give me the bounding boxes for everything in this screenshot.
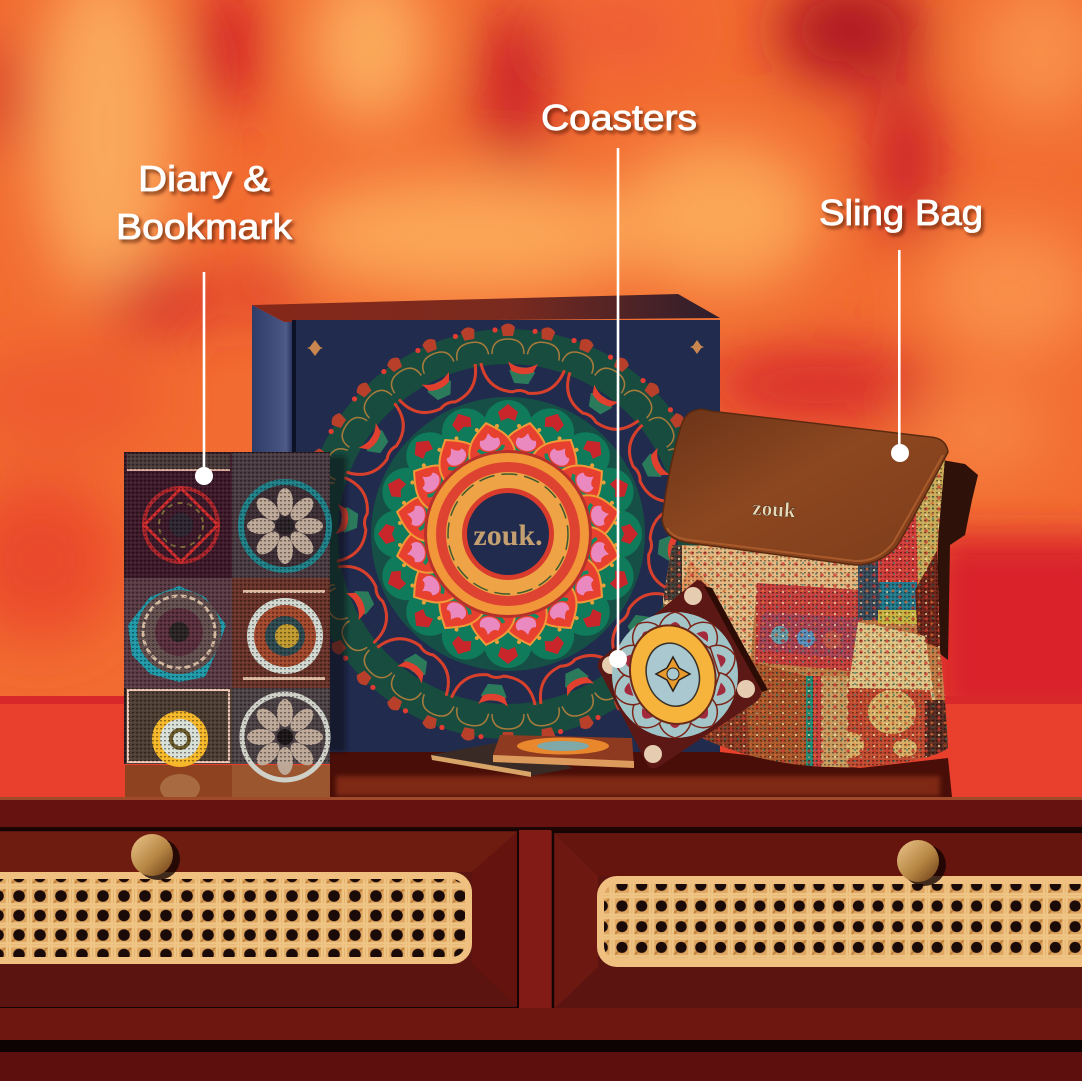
- scalloped rim: [298, 324, 719, 744]
- label: Diary & Bookmark: [116, 158, 293, 247]
- tile top-left maroon: [125, 453, 232, 578]
- coaster corner petals: [602, 587, 755, 763]
- sling bag: [655, 409, 978, 780]
- tile bottom-left yellow ring: [126, 688, 232, 767]
- pink lotus petals: [393, 419, 623, 649]
- left knob: [131, 834, 180, 880]
- left drawer: [0, 830, 518, 1008]
- bag logo: zouk: [752, 496, 797, 523]
- pointer: coasters: [609, 148, 627, 668]
- background: blurred orange and red wall: [0, 0, 1082, 725]
- diary: [124, 452, 332, 780]
- tile middle-right pale ring: [232, 578, 330, 688]
- gift box: [252, 294, 720, 752]
- shadow cast by the diary: [326, 456, 346, 752]
- table top: [0, 696, 1082, 802]
- red lower-right wall: [930, 535, 1082, 725]
- label: Coasters: Coasters: [541, 97, 697, 138]
- green lobes: [374, 400, 642, 668]
- label: Sling Bag: Sling Bag: [819, 192, 983, 233]
- right cane panel: [597, 876, 1082, 967]
- label: Diary & Bookmark: Diary &: [138, 158, 270, 199]
- strap: [935, 460, 978, 660]
- pointer: sling bag: [891, 250, 909, 462]
- corner ornaments: [307, 340, 704, 356]
- standing coaster: [598, 580, 768, 768]
- tile top-right teal: [232, 453, 332, 578]
- pointer: diary: [195, 272, 213, 485]
- bag body patchwork: [663, 460, 948, 768]
- outer green band: [303, 329, 713, 739]
- tile middle-left blue star: [124, 578, 232, 688]
- right knob: [897, 840, 946, 886]
- leather flap: [662, 409, 948, 565]
- box lid top: [252, 294, 720, 322]
- box logo: zouk.: [473, 519, 543, 552]
- mandala artwork: [298, 324, 719, 744]
- right drawer: [553, 832, 1082, 1010]
- left cane panel: [0, 872, 472, 964]
- flat coasters: [431, 735, 634, 777]
- box front: [292, 320, 720, 752]
- box left side: [252, 305, 292, 752]
- navy arches ring: [333, 359, 683, 709]
- tile bottom-right white flower: [232, 688, 330, 780]
- label: Diary & Bookmark: Bookmark: [116, 206, 293, 247]
- center post: [519, 830, 551, 1008]
- bottom rails: [0, 1008, 1082, 1081]
- central rings: [424, 450, 592, 618]
- cabinet with drawers: [0, 797, 1082, 1081]
- red flowers: [378, 404, 638, 664]
- dark green disc: [371, 397, 645, 671]
